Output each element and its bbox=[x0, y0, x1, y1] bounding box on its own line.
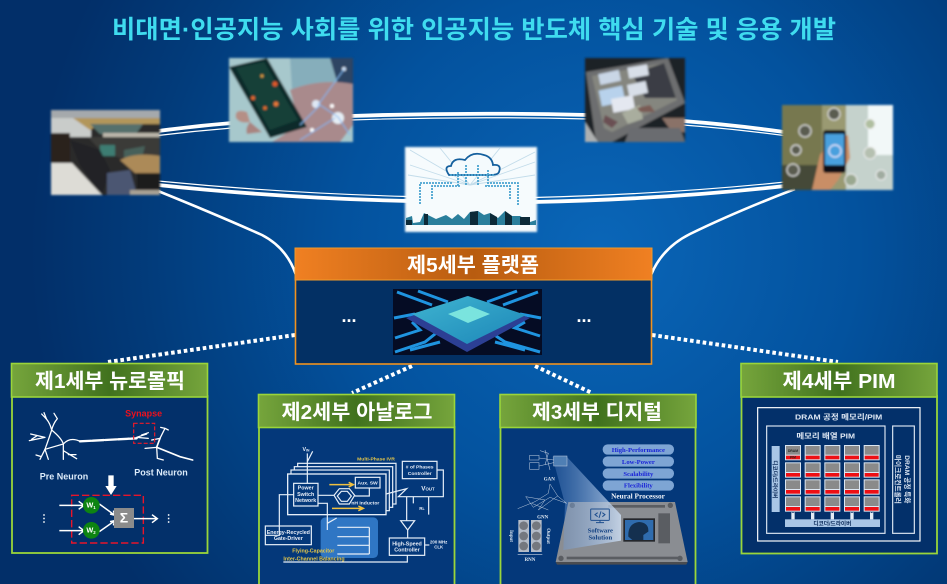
chip image bbox=[393, 289, 542, 355]
heading: analog bbox=[258, 394, 454, 428]
label: DRAM microcontroller: DRAM 공정 특화 bbox=[903, 455, 912, 503]
circuit labels: 200 MHz bbox=[430, 539, 447, 544]
circuit labels: V bbox=[303, 447, 306, 453]
label: synapse: Synapse bbox=[125, 409, 162, 419]
circuit labels: Power bbox=[298, 485, 314, 491]
circuit labels: IN bbox=[306, 449, 310, 453]
neural processor diagram: RNN bbox=[525, 558, 536, 563]
neural processor diagram: Solution bbox=[588, 534, 612, 541]
panel: sub-project 1 neuromorphic: 제1세부 뉴로몰픽 bbox=[35, 370, 185, 393]
circuit labels: Gate-Driver bbox=[274, 536, 303, 542]
GNN icon bbox=[518, 484, 567, 510]
circuit labels: Controller bbox=[408, 471, 432, 477]
icon: cloud bbox=[446, 154, 500, 175]
circuit labels: Aux. SW bbox=[358, 481, 378, 487]
connector: left photo to platform bbox=[158, 191, 296, 275]
circuit labels: Flying-Capacitor bbox=[292, 549, 334, 555]
circuit labels: Inter-Channel Balancing bbox=[283, 557, 345, 563]
feature pills: Low-Power bbox=[622, 459, 655, 466]
perceptron: ⋮ bbox=[164, 513, 174, 524]
neural processor diagram: Output bbox=[545, 528, 550, 544]
decoder left bbox=[772, 446, 780, 512]
feature pills: Flexibility bbox=[624, 483, 653, 490]
memory cell grid bbox=[785, 445, 880, 512]
label: DRAM microcontroller: 마이크로컨트롤러 bbox=[894, 455, 903, 504]
circuit labels: Switch bbox=[297, 492, 314, 498]
panel: sub-project 1 neuromorphic bbox=[12, 364, 208, 553]
synapse marker bbox=[134, 423, 155, 443]
label: pre neuron: Pre Neuron bbox=[40, 471, 88, 481]
PIM architecture diagram: 디코더/드라이버 bbox=[771, 460, 779, 498]
heading: PIM bbox=[741, 364, 937, 397]
software beam bbox=[552, 457, 621, 550]
perceptron: ⋮ bbox=[39, 513, 49, 524]
GAN icon bbox=[530, 450, 567, 470]
heading: platform bbox=[295, 248, 652, 280]
icon: monitor bbox=[591, 509, 609, 523]
lower connecting arc bbox=[158, 181, 785, 202]
photo: autonomous car interior bbox=[51, 110, 160, 195]
memory cell grid: PIM bbox=[790, 456, 796, 460]
heading: digital bbox=[500, 394, 696, 428]
title: 비대면·인공지능 사회를 위한 인공지능 반도체 핵심 기술 및 응용 개발 bbox=[112, 16, 836, 44]
PIM architecture diagram: DRAM 공정 메모리/PIM bbox=[795, 412, 882, 421]
photo: AR interface screen bbox=[585, 58, 685, 142]
perceptron bbox=[39, 497, 174, 539]
upper connecting arc bbox=[158, 114, 784, 136]
panel: platform: 제5세부 플랫폼 bbox=[407, 254, 539, 277]
neuron diagram bbox=[29, 409, 193, 543]
panel: sub-project 2 analog: 제2세부 아날로그 bbox=[282, 401, 432, 424]
arrows to decoder bbox=[791, 512, 873, 519]
photo: smart home on phone bbox=[782, 105, 893, 190]
circuit labels: Energy-Recycled bbox=[267, 530, 310, 536]
circuit labels: Multi-Phase IVR bbox=[357, 457, 395, 463]
PIM architecture diagram: 메모리 배열 PIM bbox=[796, 432, 855, 441]
neural processor diagram: GNN bbox=[537, 515, 549, 520]
circuit labels: VOUT bbox=[421, 486, 435, 493]
processor board bbox=[556, 502, 688, 562]
perceptron: Σ bbox=[120, 510, 128, 526]
PIM architecture diagram: 디코더/드라이버 bbox=[813, 519, 851, 527]
arrow: down bbox=[105, 475, 117, 495]
circuit labels: Controller bbox=[394, 548, 420, 554]
panel: sub-project 4 PIM bbox=[741, 364, 937, 554]
perceptron: 2 bbox=[93, 530, 96, 535]
panel: sub-project 3 digital bbox=[500, 394, 696, 584]
dotted links from platform to sub-projects bbox=[108, 335, 838, 393]
circuit labels: CLK bbox=[434, 545, 444, 550]
circuit labels: High-Speed bbox=[392, 541, 422, 547]
neural processor diagram bbox=[508, 444, 688, 565]
feature pills bbox=[603, 444, 674, 491]
flying capacitor block bbox=[321, 517, 378, 558]
perceptron: 1 bbox=[93, 505, 96, 510]
panel: sub-project 4 PIM: 제4세부 PIM bbox=[782, 370, 896, 393]
perceptron: W bbox=[86, 501, 93, 510]
neural processor diagram: GAN bbox=[544, 477, 555, 482]
memory cell grid: DRAM bbox=[788, 449, 798, 453]
circuit labels: RL bbox=[419, 506, 425, 511]
ellipsis left: ... bbox=[341, 306, 357, 326]
decoder bottom bbox=[785, 519, 880, 527]
panel: platform bbox=[295, 248, 652, 364]
PIM architecture diagram bbox=[758, 408, 920, 541]
label: post neuron: Post Neuron bbox=[134, 467, 188, 477]
label: neural processor: Neural Processor bbox=[611, 491, 666, 500]
photo: cloud and city bbox=[405, 147, 537, 232]
RNN icon bbox=[518, 520, 542, 555]
circuit labels: Network bbox=[295, 498, 316, 504]
panel: sub-project 2 analog bbox=[258, 394, 454, 584]
label: software solution: Software bbox=[588, 527, 613, 534]
panel: sub-project 3 digital: 제3세부 디지털 bbox=[532, 401, 662, 424]
feature pills: High-Performance bbox=[612, 447, 665, 454]
circuit diagram bbox=[265, 447, 447, 563]
photo: smartphone with network bbox=[229, 58, 353, 142]
circuit labels: # of Phases bbox=[406, 465, 434, 471]
heading: neuromorphic bbox=[12, 364, 208, 397]
perceptron dashed box bbox=[72, 495, 143, 543]
feature pills: Scalability bbox=[623, 471, 654, 478]
connector: right photo to platform bbox=[651, 189, 795, 275]
perceptron: W bbox=[86, 526, 93, 535]
label: DRAM microcontroller bbox=[894, 455, 912, 504]
neural processor diagram: Input bbox=[508, 530, 513, 542]
circuit labels bbox=[267, 447, 447, 563]
ellipsis right: ... bbox=[576, 306, 592, 326]
circuit labels: nH Inductor bbox=[351, 501, 379, 507]
